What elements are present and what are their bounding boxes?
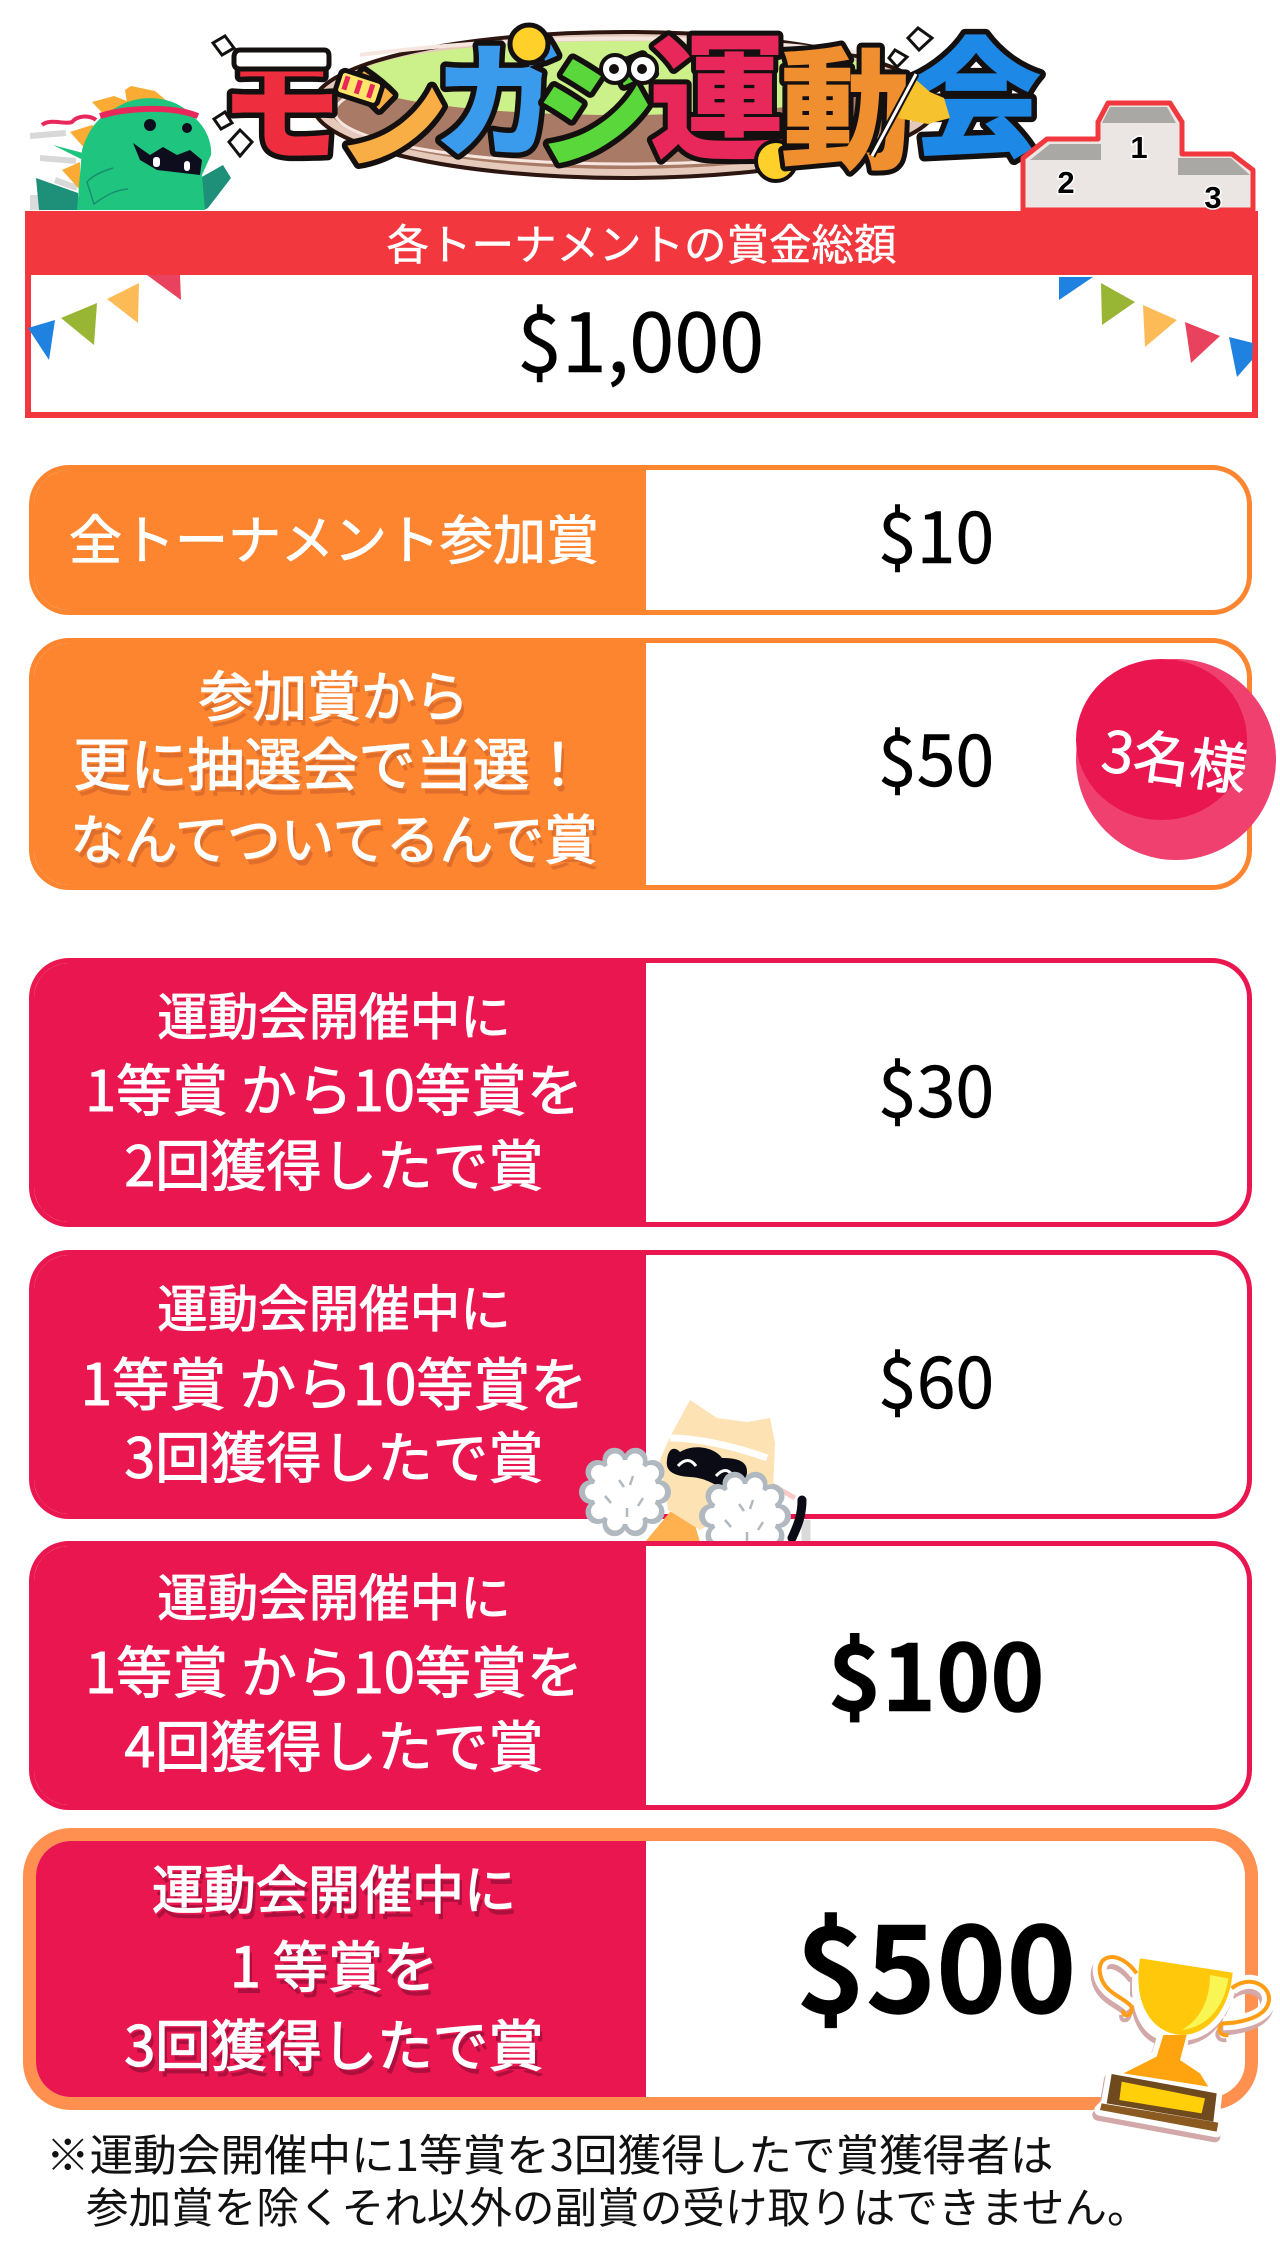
badge text: 3名様 [1097,706,1253,808]
row label: 1等賞 から10等賞を [85,1047,583,1128]
row label: 全トーナメント参加賞 [69,499,599,575]
row label: 1等賞 から10等賞を [81,1340,587,1422]
prize value: $10 [878,483,994,584]
row: lottery prize $50 [29,638,1252,890]
logo: モンガジ運動会: モ [220,9,342,186]
icon: podium [1020,100,1256,215]
icon: podium: 1 [1130,130,1148,165]
logo: モンガジ運動会: ジ [537,16,657,190]
logo: モンガジ運動会: 動 [780,6,912,197]
headband on the first letter [234,50,329,69]
row label [85,1557,583,1783]
prize value: $60 [878,1328,994,1429]
slot machine [334,69,384,107]
row label: 2回獲得したで賞 [124,1122,544,1202]
tail [792,1500,802,1538]
row label [70,653,597,875]
left pompom [579,1448,671,1536]
logo: モンガジ運動会: ガ [434,1,560,182]
bunting: left [28,275,181,360]
row label: 1等賞 から10等賞を [85,1629,583,1710]
icon: podium: 2 [1057,165,1075,200]
logo: モンガジ運動会: ン [336,29,448,191]
row: 3 wins prize $60 [29,1250,1252,1519]
banner heading: 各トーナメントの賞金総額 [386,212,896,273]
row label: 運動会開催中に [157,1268,511,1342]
row: participation prize $10 [29,465,1252,615]
row label: 1 等賞を [230,1923,438,2003]
prize value: $50 [878,706,994,807]
row: grand prize $500 [23,1828,1258,2110]
footnote [46,2120,1150,2236]
row label: 運動会開催中に [157,1557,511,1631]
row label [81,1268,587,1494]
prize value: $30 [878,1037,994,1138]
row label: なんてついてるんで賞 [70,798,597,875]
icon: green monster mascot [30,86,231,210]
prize value: $500 [796,1876,1076,2048]
row label: 3回獲得したで賞 [124,1414,544,1494]
row label [85,976,583,1202]
row: 4 wins prize $100 [29,1541,1252,1810]
icon: cheering cat with pompoms [579,1400,810,1541]
bunting: right [1059,277,1253,377]
row label: 3回獲得したで賞 [124,2002,544,2082]
icon: gold trophy [1090,1955,1274,2142]
footnote: ※運動会開催中に1等賞を3回獲得したで賞獲得者は [46,2120,1053,2184]
panel: total prize per tournament [25,211,1258,418]
footnote: 参加賞を除くそれ以外の副賞の受け取りはできません。 [86,2175,1150,2236]
row label [124,1849,544,2082]
flag [898,78,950,124]
prize value: $100 [827,1605,1045,1738]
row label: 運動会開催中に [152,1849,516,1924]
row label: 4回獲得したで賞 [124,1703,544,1783]
right pompom [699,1472,791,1541]
logo: モンガジ運動会: 会 [910,0,1042,186]
total amount: $1,000 [517,279,764,396]
logo: モンガジ運動会 [210,0,1046,197]
sparkles [213,28,932,156]
row label: 更に抽選会で当選！ [74,720,586,802]
row label: 運動会開催中に [157,976,511,1050]
row: 2 wins prize $30 [29,958,1252,1227]
row label: 参加賞から [199,653,469,732]
banner heading [25,211,1258,275]
badge: 3 winners [1076,659,1276,860]
icon: podium: 3 [1204,180,1222,215]
